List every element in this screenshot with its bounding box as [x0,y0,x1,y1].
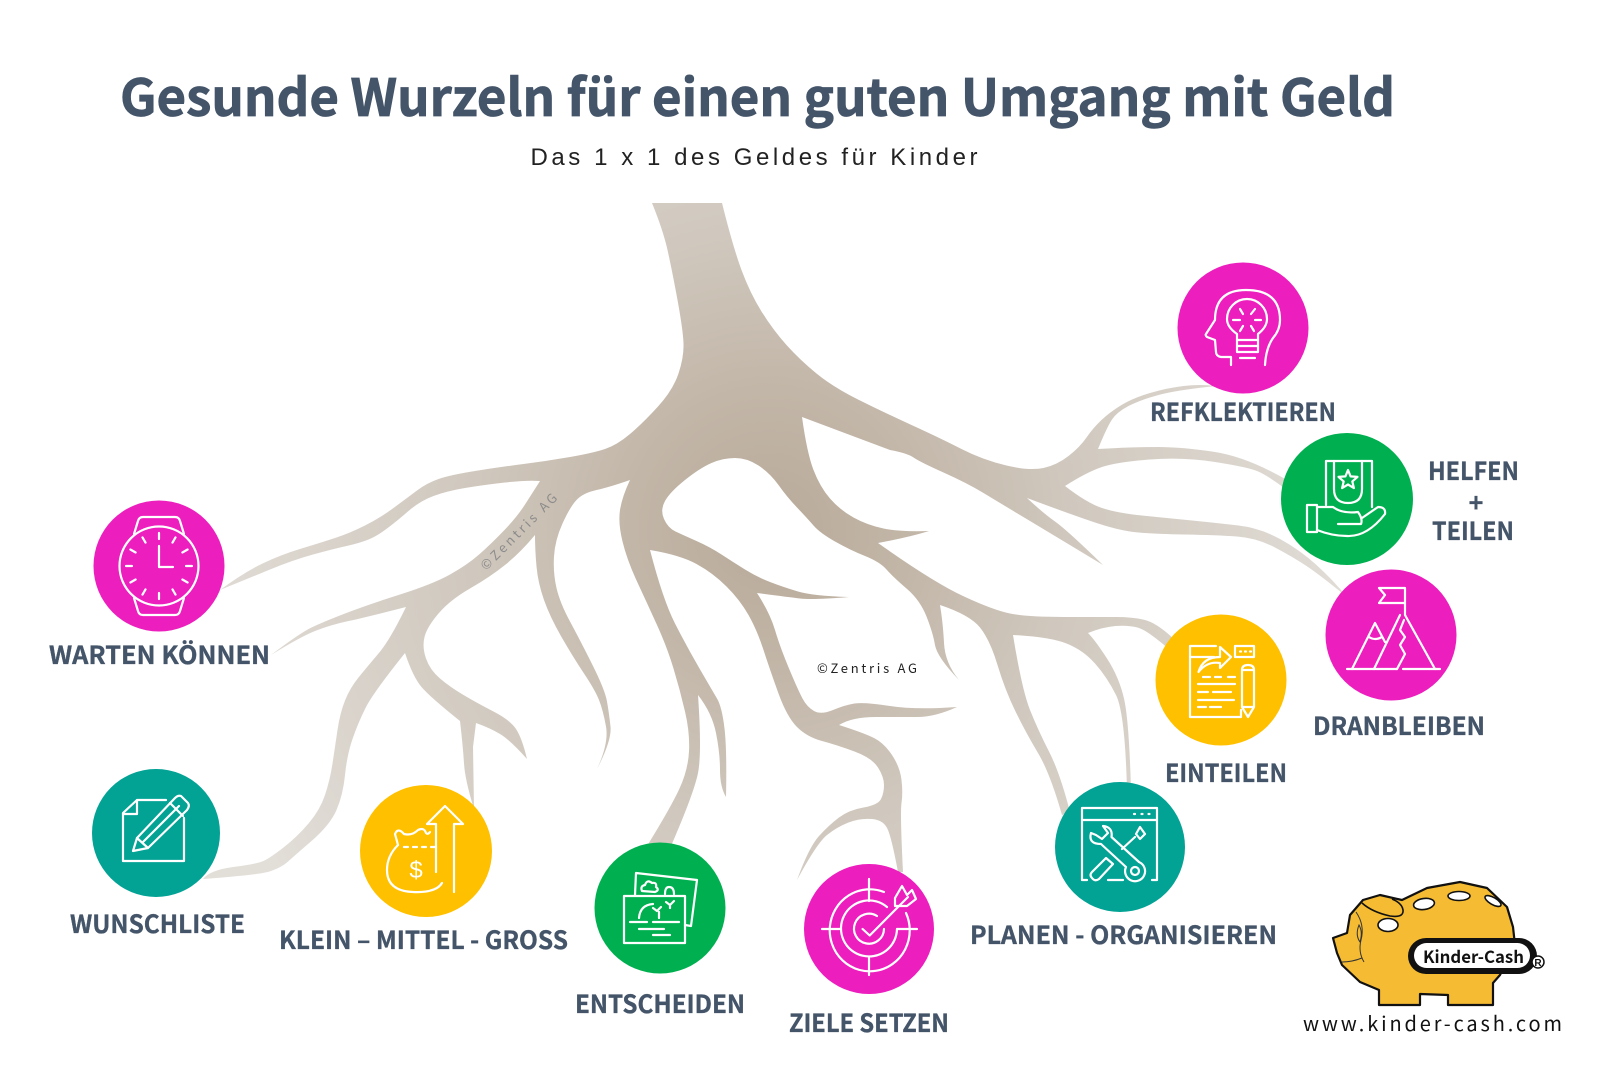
title: Gesunde Wurzeln für einen guten Umgang mit Geld [120,57,1395,131]
node: entscheiden [575,842,745,1021]
node: warten können [49,500,270,672]
tree roots [203,203,1347,880]
logo: piggy bank [1333,882,1544,1005]
icon: money bag with arrow [387,806,463,892]
icon: document with pencil [1190,646,1254,717]
logo: piggy bank: R [1534,958,1542,969]
label: WARTEN KÖNNEN [49,636,270,672]
node: einteilen [1156,614,1287,790]
node: helfen teilen [1281,433,1519,565]
icon: photos [624,873,697,943]
label: ENTSCHEIDEN [575,985,745,1021]
node: reflektieren [1150,262,1336,429]
labels: HELFEN [1428,452,1519,488]
label: PLANEN - ORGANISIEREN [970,916,1277,952]
label: DRANBLEIBEN [1313,707,1485,743]
icon: window with tools [1082,808,1157,881]
icon: target with arrow [822,879,917,975]
node: wunschliste [70,769,245,941]
icon: hand holding card [1307,461,1385,536]
label: EINTEILEN [1165,754,1287,790]
node: ziele setzen [789,864,949,1040]
icon: watch [120,517,198,615]
node: dranbleiben [1313,570,1485,743]
labels: + [1469,484,1483,520]
icon: money bag with arrow: $ [409,857,423,884]
node: klein mittel gross [279,785,568,957]
subtitle: Das 1 x 1 des Geldes für Kinder [530,144,978,171]
logo: piggy bank: Kinder-Cash [1423,943,1524,968]
label: WUNSCHLISTE [70,905,245,941]
labels [1428,452,1519,548]
label: KLEIN – MITTEL - GROSS [279,921,568,957]
watermark: ©Zentris AG [817,658,917,677]
labels: TEILEN [1432,512,1514,548]
label: ZIELE SETZEN [789,1004,949,1040]
website url: www.kinder-cash.com [1303,1008,1562,1037]
node: planen organisieren [970,782,1277,952]
label: REFKLEKTIEREN [1150,393,1336,429]
icon: note and pencil [123,796,189,861]
icon: mountain with flag [1347,588,1440,669]
watermark on root: ©Zentris AG [475,488,561,574]
icon: head with light bulb [1206,290,1280,365]
